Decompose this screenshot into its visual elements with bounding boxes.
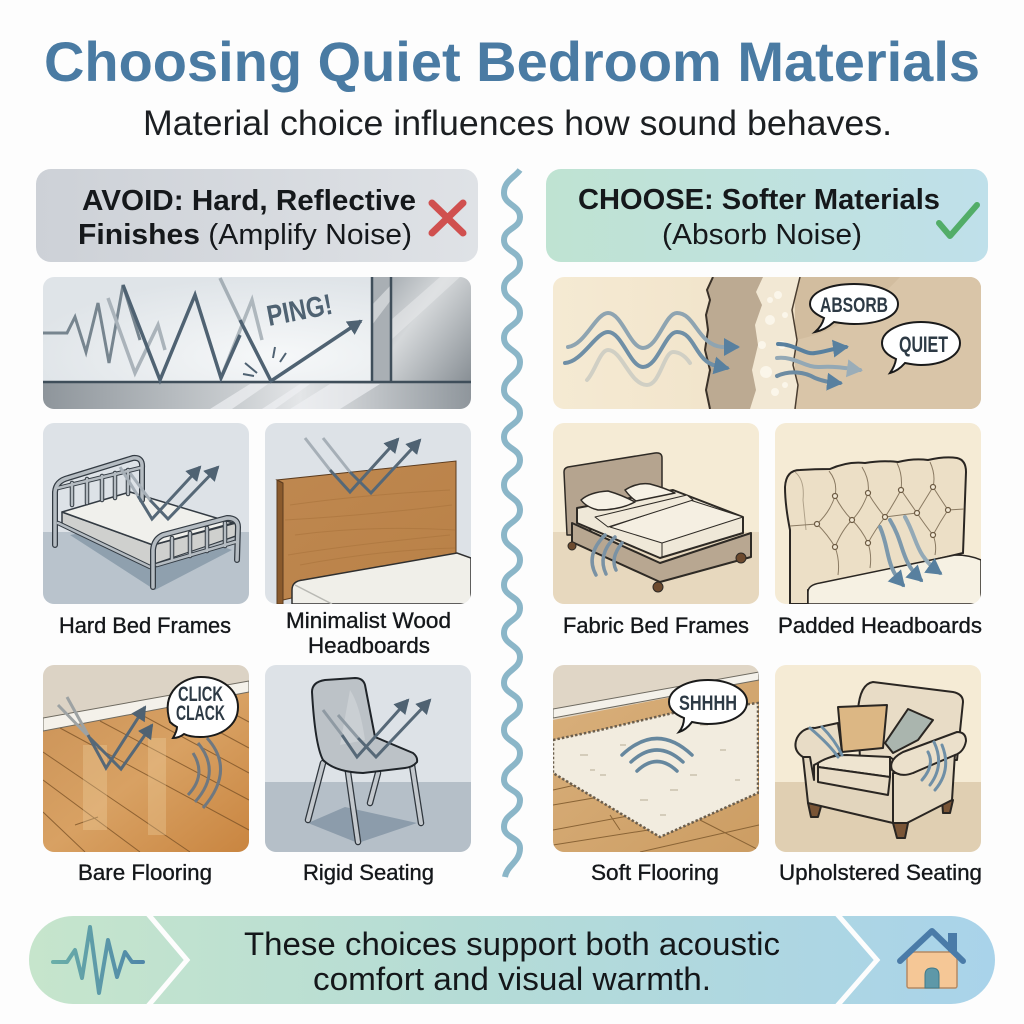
label: ping: PING! [264, 289, 335, 333]
fabric bed illustration [564, 453, 751, 592]
armchair illustration [795, 682, 966, 838]
wood headboard illustration [277, 461, 471, 604]
panel: hard bed frame [43, 423, 249, 604]
panel: choose header [546, 169, 988, 262]
fluffy layer [750, 277, 800, 409]
wavy divider [504, 170, 520, 877]
panel: hard surface reflection [43, 277, 471, 409]
speech bubble: shhhh: SHHHH [679, 692, 737, 715]
rug [553, 703, 758, 837]
conclusion text [244, 926, 780, 997]
wood planks [553, 785, 759, 852]
sound wave trace [43, 278, 361, 381]
banner: conclusion [29, 914, 995, 1006]
chair illustration [308, 678, 421, 842]
incoming sound waves [565, 313, 860, 385]
reflected arrow [240, 320, 361, 381]
label: hard bed frames: Hard Bed Frames [59, 613, 231, 638]
sound wave lines [810, 727, 946, 790]
speech bubble: click clack [168, 677, 238, 738]
speech bubble: absorb [810, 284, 898, 332]
title: Choosing Quiet Bedroom Materials [44, 30, 980, 93]
speech bubble: shhhh [669, 680, 747, 732]
label: minimalist wood headboards: Minimalist Wood [286, 608, 451, 633]
speech bubble: absorb: ABSORB [820, 294, 888, 317]
choose heading line 2: (Absorb Noise) [662, 219, 862, 251]
sound wave lines [592, 535, 622, 575]
subtitle: Material choice influences how sound behaves. [143, 104, 892, 143]
icon: green check [939, 205, 977, 236]
label: upholstered seating: Upholstered Seating [779, 860, 982, 885]
floor planks [43, 701, 249, 852]
panel: soft material absorption [553, 277, 981, 409]
avoid heading line 2: Finishes (Amplify Noise) [78, 219, 412, 251]
padded headboard illustration [785, 457, 981, 604]
choose heading line 1: CHOOSE: Softer Materials [578, 184, 940, 216]
speech bubble: quiet: QUIET [899, 332, 948, 357]
label: fabric bed frames: Fabric Bed Frames [563, 613, 749, 638]
icon: house [900, 931, 963, 988]
bed illustration [55, 458, 238, 587]
label: padded headboards: Padded Headboards [778, 613, 982, 638]
reflection arrows [58, 697, 152, 769]
label: minimalist wood headboards [286, 608, 451, 658]
label: soft flooring: Soft Flooring [591, 860, 719, 885]
panel: upholstered seating [775, 665, 981, 852]
conclusion text: comfort and visual warmth. [313, 961, 711, 997]
panel: wood headboard [265, 423, 471, 604]
speech bubble: quiet [882, 322, 960, 373]
foam layer [705, 277, 765, 409]
sound arcs [188, 738, 221, 808]
sound arcs [622, 738, 692, 771]
panel: bare flooring [43, 665, 249, 852]
panel: soft flooring [553, 665, 759, 852]
reflection arrows [305, 438, 420, 493]
reflection arrows [120, 467, 218, 519]
reflection arrows [323, 700, 430, 757]
sound arrows [880, 517, 940, 585]
speech bubble: click clack: CLICK [178, 683, 223, 706]
panel: rigid seating [265, 665, 471, 852]
icon: pulse wave [53, 927, 143, 993]
label: minimalist wood headboards: Headboards [308, 633, 430, 658]
panel: avoid header [36, 169, 478, 262]
label: rigid seating: Rigid Seating [303, 860, 434, 885]
avoid heading line 1: AVOID: Hard, Reflective [82, 185, 416, 217]
panel: padded headboard [775, 423, 981, 604]
speech bubble: click clack: CLACK [176, 702, 225, 725]
conclusion text: These choices support both acoustic [244, 926, 780, 962]
panel: fabric bed [553, 423, 759, 604]
icon: red cross [432, 203, 463, 233]
label: bare flooring: Bare Flooring [78, 860, 212, 885]
